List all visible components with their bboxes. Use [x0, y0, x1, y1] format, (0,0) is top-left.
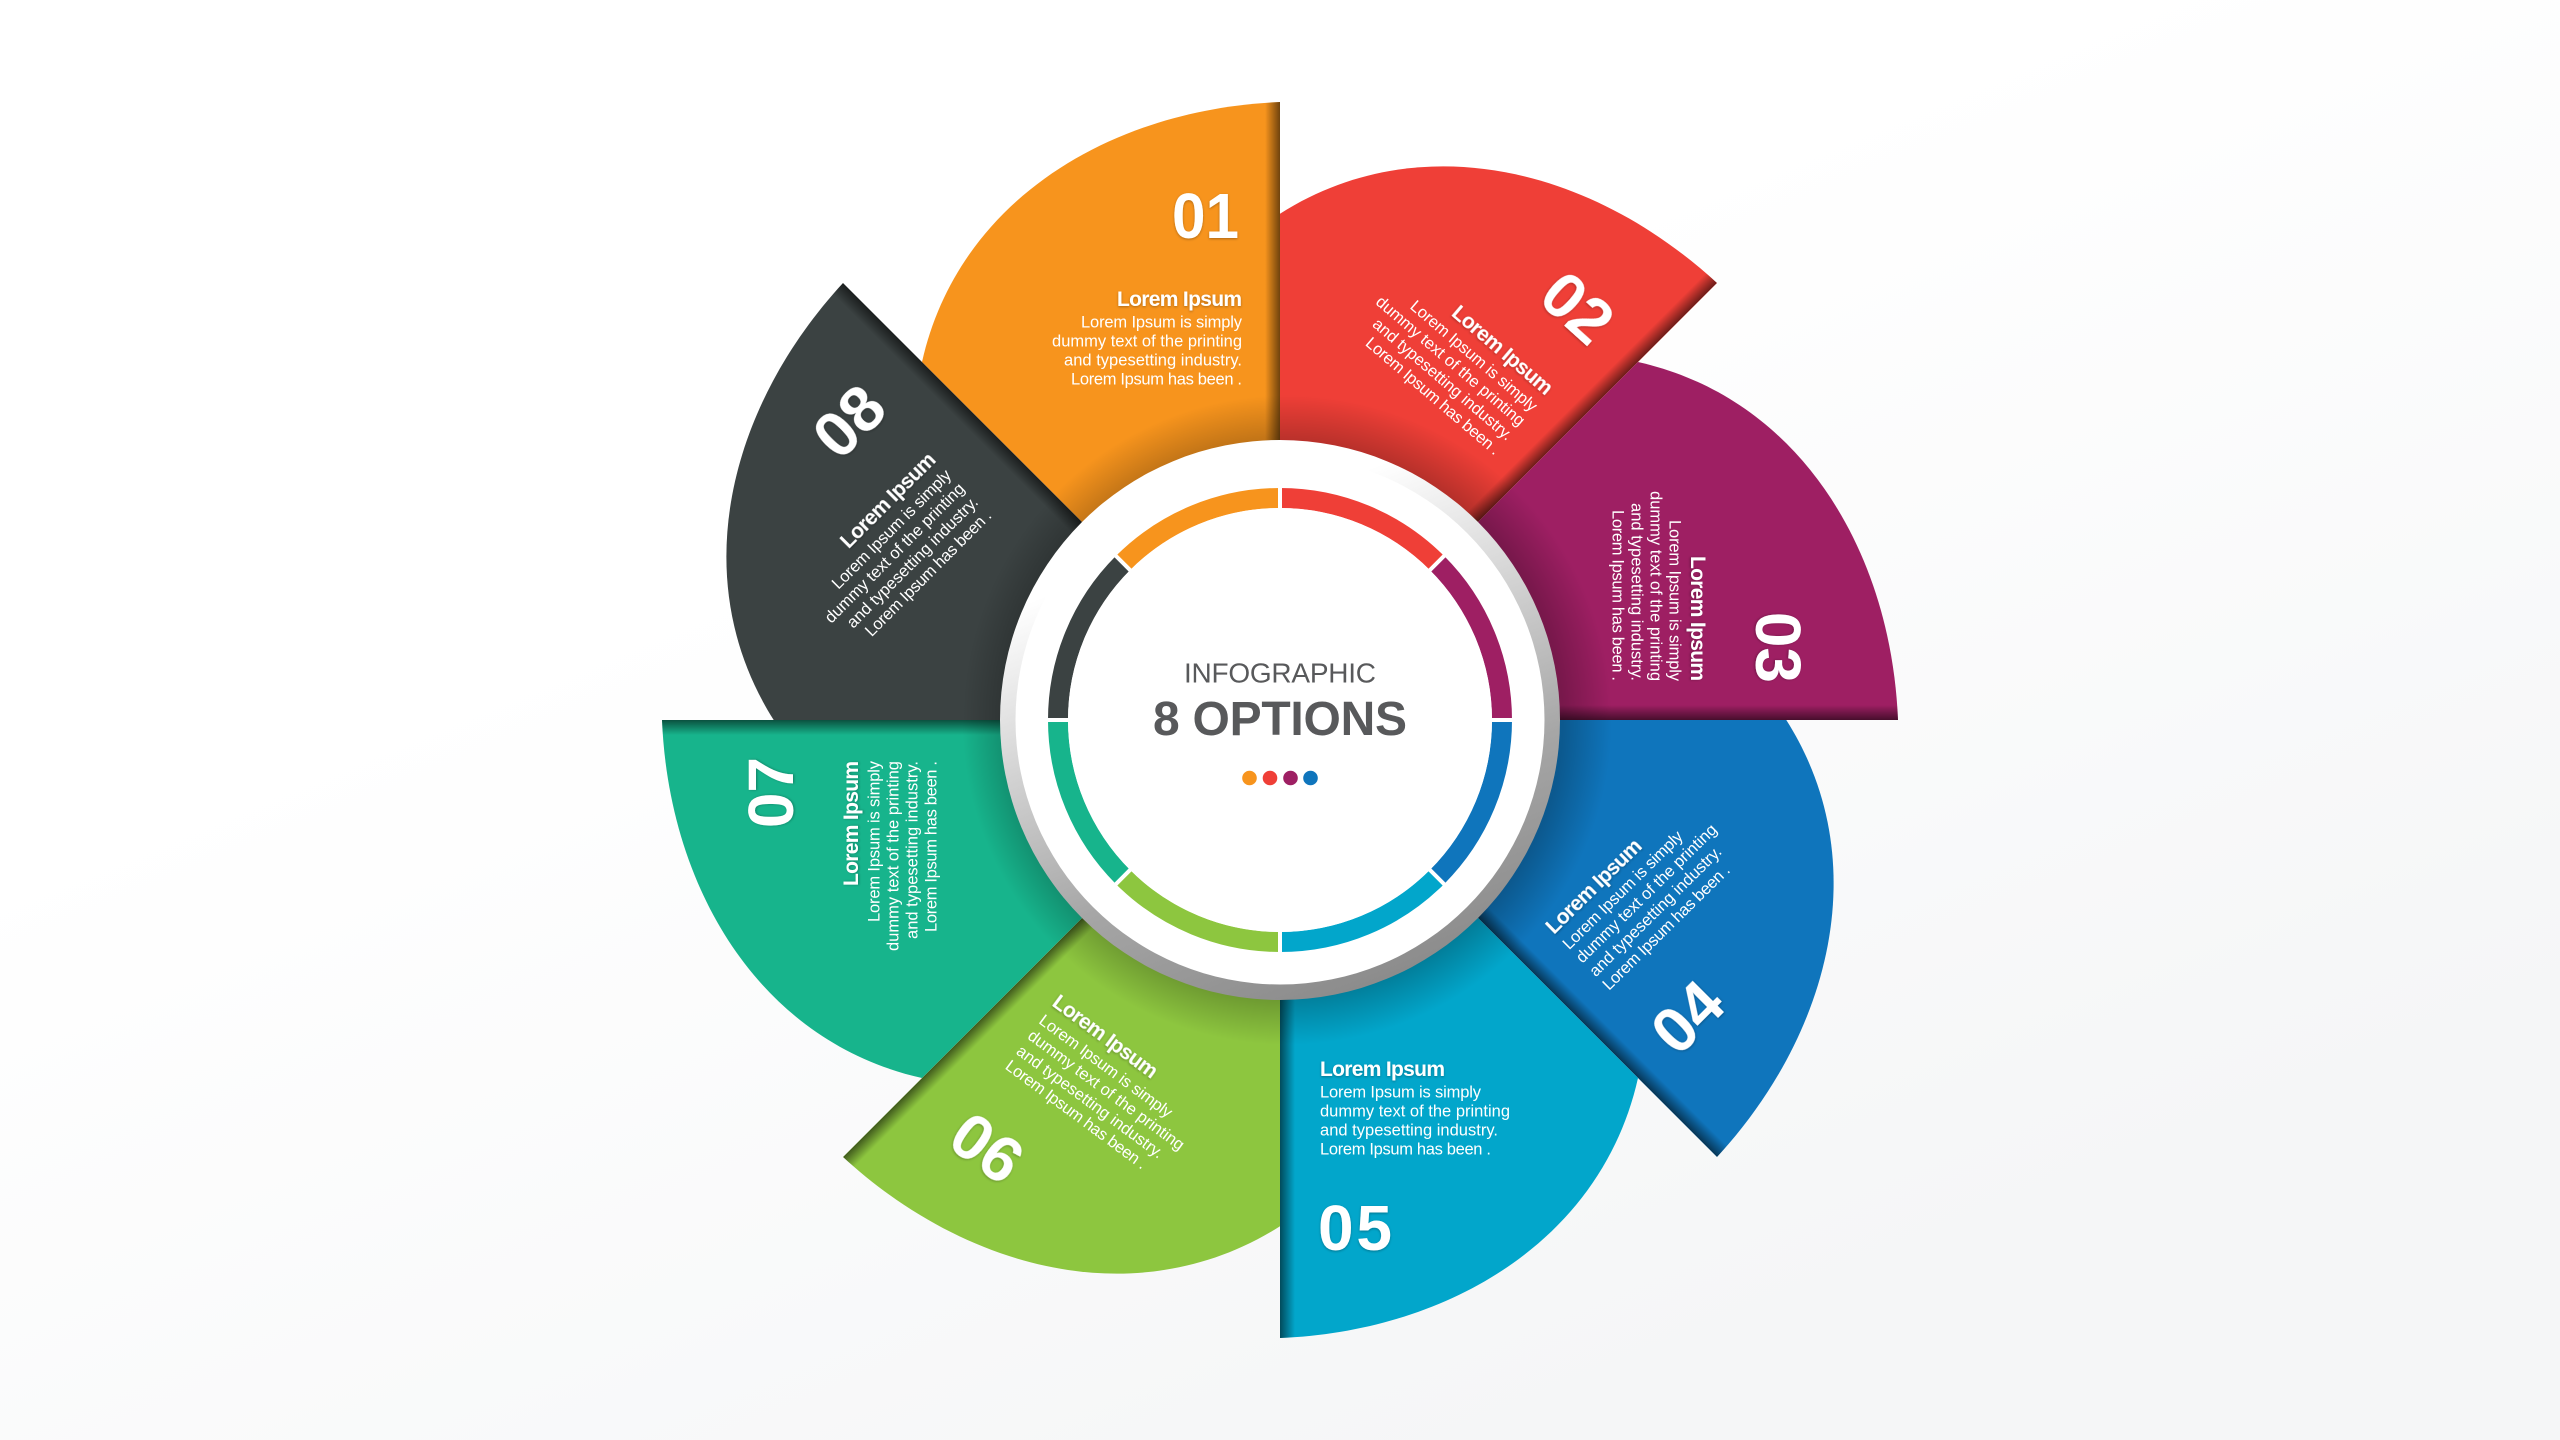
text block 07: dummy text of the printing — [884, 761, 902, 951]
text block 01: dummy text of the printing — [1052, 332, 1242, 350]
title: infographic: INFOGRAPHIC — [1184, 658, 1376, 688]
text block 05: Lorem Ipsum has been . — [1320, 1140, 1491, 1158]
blade 01 shape — [922, 102, 1280, 522]
text block 03: and typesetting industry. — [1628, 503, 1646, 681]
text block 06 — [1002, 991, 1214, 1184]
text block 04 — [1541, 789, 1747, 994]
text block 08: and typesetting industry. — [843, 493, 982, 632]
number 01: 01 — [1172, 180, 1239, 252]
text block 07: Lorem Ipsum is simply — [866, 760, 884, 922]
blade 02 shape — [1280, 166, 1717, 522]
central hub — [1000, 440, 1560, 1000]
text block 08: Lorem Ipsum is simply — [828, 466, 956, 593]
text block 02: Lorem Ipsum — [1447, 301, 1557, 400]
text block 03: Lorem Ipsum is simply — [1666, 520, 1684, 682]
text block 02 — [1347, 259, 1558, 459]
text block 04: Lorem Ipsum has been . — [1599, 861, 1734, 994]
panel: option 05 — [1280, 918, 1638, 1338]
text block 01: Lorem Ipsum — [1117, 288, 1242, 311]
hub white disc — [1016, 456, 1544, 984]
text block 06: dummy text of the printing — [1024, 1027, 1188, 1154]
decorative colour dots — [1242, 771, 1318, 785]
text block 06: Lorem Ipsum has been . — [1002, 1057, 1150, 1173]
text block 04: dummy text of the printing — [1573, 821, 1721, 967]
panel: option 03 — [1478, 362, 1898, 720]
number 05: 05 — [1318, 1192, 1392, 1264]
text block 05 — [1320, 1058, 1510, 1158]
panel: option 01 — [922, 102, 1280, 522]
blade 06 shape — [843, 918, 1280, 1274]
text block 04: Lorem Ipsum — [1541, 835, 1647, 939]
panel: option 02 — [1280, 166, 1717, 522]
number 03: 03 — [1742, 612, 1814, 683]
text block 07: and typesetting industry. — [904, 761, 922, 939]
text block 07: Lorem Ipsum has been . — [922, 761, 940, 932]
blade 03 shape — [1478, 362, 1898, 720]
number 04: 04 — [1637, 966, 1739, 1068]
ring segment 02 — [1280, 498, 1437, 563]
ring segment 07 — [1058, 720, 1123, 877]
text block 05: Lorem Ipsum is simply — [1320, 1084, 1482, 1102]
blade 07 shape — [662, 720, 1082, 1078]
panel: option 07 — [662, 720, 1082, 1078]
text block 02: Lorem Ipsum has been . — [1362, 334, 1504, 459]
text block 08 — [790, 448, 996, 654]
segmented colour ring — [1058, 498, 1502, 942]
ring segment 01 — [1123, 498, 1280, 563]
text block 03: Lorem Ipsum has been . — [1608, 510, 1626, 681]
text block 07: Lorem Ipsum — [840, 761, 863, 886]
text block 02: and typesetting industry. — [1369, 315, 1516, 444]
text block 02: Lorem Ipsum is simply — [1407, 297, 1541, 416]
hub shadow on blades — [962, 395, 1612, 1045]
title: 8 options: 8 OPTIONS — [1153, 693, 1407, 746]
text block 03 — [1608, 491, 1709, 682]
panel: option 08 — [726, 283, 1082, 720]
text block 02: dummy text of the printing — [1372, 293, 1528, 430]
ring segment 03 — [1437, 563, 1502, 720]
text block 06: Lorem Ipsum — [1048, 991, 1162, 1083]
panel: option 06 — [843, 918, 1280, 1274]
text block 05: Lorem Ipsum — [1320, 1058, 1445, 1081]
ring segment 08 — [1058, 563, 1123, 720]
number 02: 02 — [1527, 257, 1628, 358]
ring segment 04 — [1437, 720, 1502, 877]
text block 03: dummy text of the printing — [1646, 491, 1664, 681]
text block 04: Lorem Ipsum is simply — [1559, 827, 1687, 953]
infographic canvas — [662, 102, 2560, 1440]
text block 01: Lorem Ipsum is simply — [1081, 314, 1243, 332]
text block 08: dummy text of the printing — [821, 480, 968, 627]
panel: option 04 — [1478, 720, 1834, 1157]
text block 06: Lorem Ipsum is simply — [1036, 1011, 1176, 1122]
text block 06: and typesetting industry. — [1013, 1042, 1167, 1162]
ring segment 06 — [1123, 877, 1280, 942]
text block 05: and typesetting industry. — [1320, 1122, 1498, 1140]
blade 05 shape — [1280, 918, 1638, 1338]
text block 01: Lorem Ipsum has been . — [1071, 370, 1242, 388]
hub outer ring — [1000, 440, 1560, 1000]
text block 03: Lorem Ipsum — [1686, 556, 1709, 681]
number 06: 06 — [937, 1098, 1037, 1198]
text block 08: Lorem Ipsum has been . — [862, 507, 995, 640]
number 08: 08 — [799, 371, 900, 472]
text block 08: Lorem Ipsum — [836, 448, 941, 553]
text block 01: and typesetting industry. — [1064, 352, 1242, 370]
text block 07 — [840, 760, 940, 951]
blade 08 shape — [726, 283, 1082, 720]
text block 01 — [1052, 288, 1243, 388]
text block 05: dummy text of the printing — [1320, 1102, 1510, 1120]
number 07: 07 — [735, 757, 807, 828]
blade 04 shape — [1478, 720, 1834, 1157]
text block 04: and typesetting industry. — [1586, 843, 1725, 980]
ring segment 05 — [1280, 877, 1437, 942]
